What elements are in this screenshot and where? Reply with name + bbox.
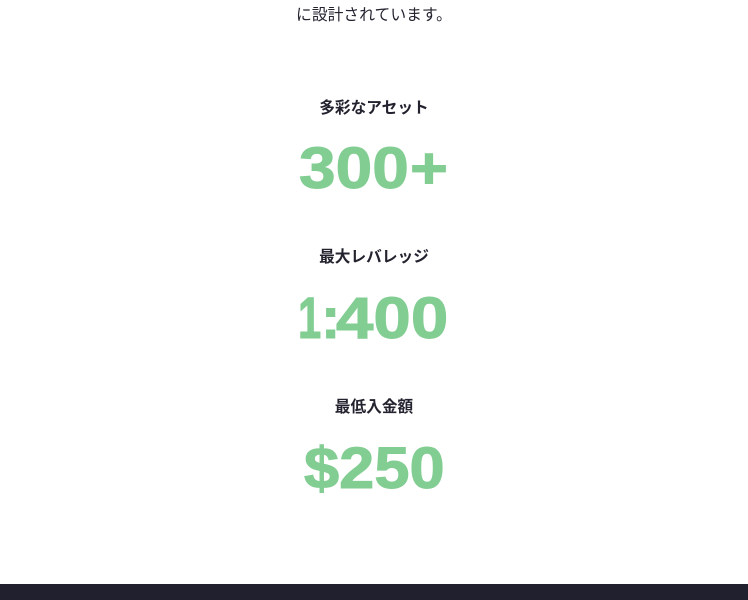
heading: leverage: 最大レバレッジ <box>319 249 429 266</box>
stat: assets: + <box>410 136 448 201</box>
heading: minimum deposit: 最低入金額 <box>335 399 413 416</box>
stat: leverage: : <box>321 286 340 351</box>
footer bar <box>0 584 748 600</box>
stat: leverage: 1 <box>298 286 321 351</box>
heading: assets: 多彩なアセット <box>319 100 429 117</box>
stat: minimum deposit: $250 <box>304 436 445 501</box>
stat: assets: 300 <box>299 136 409 201</box>
stat: leverage: 400 <box>336 286 448 351</box>
intro text: に設計されています。 <box>296 7 452 24</box>
